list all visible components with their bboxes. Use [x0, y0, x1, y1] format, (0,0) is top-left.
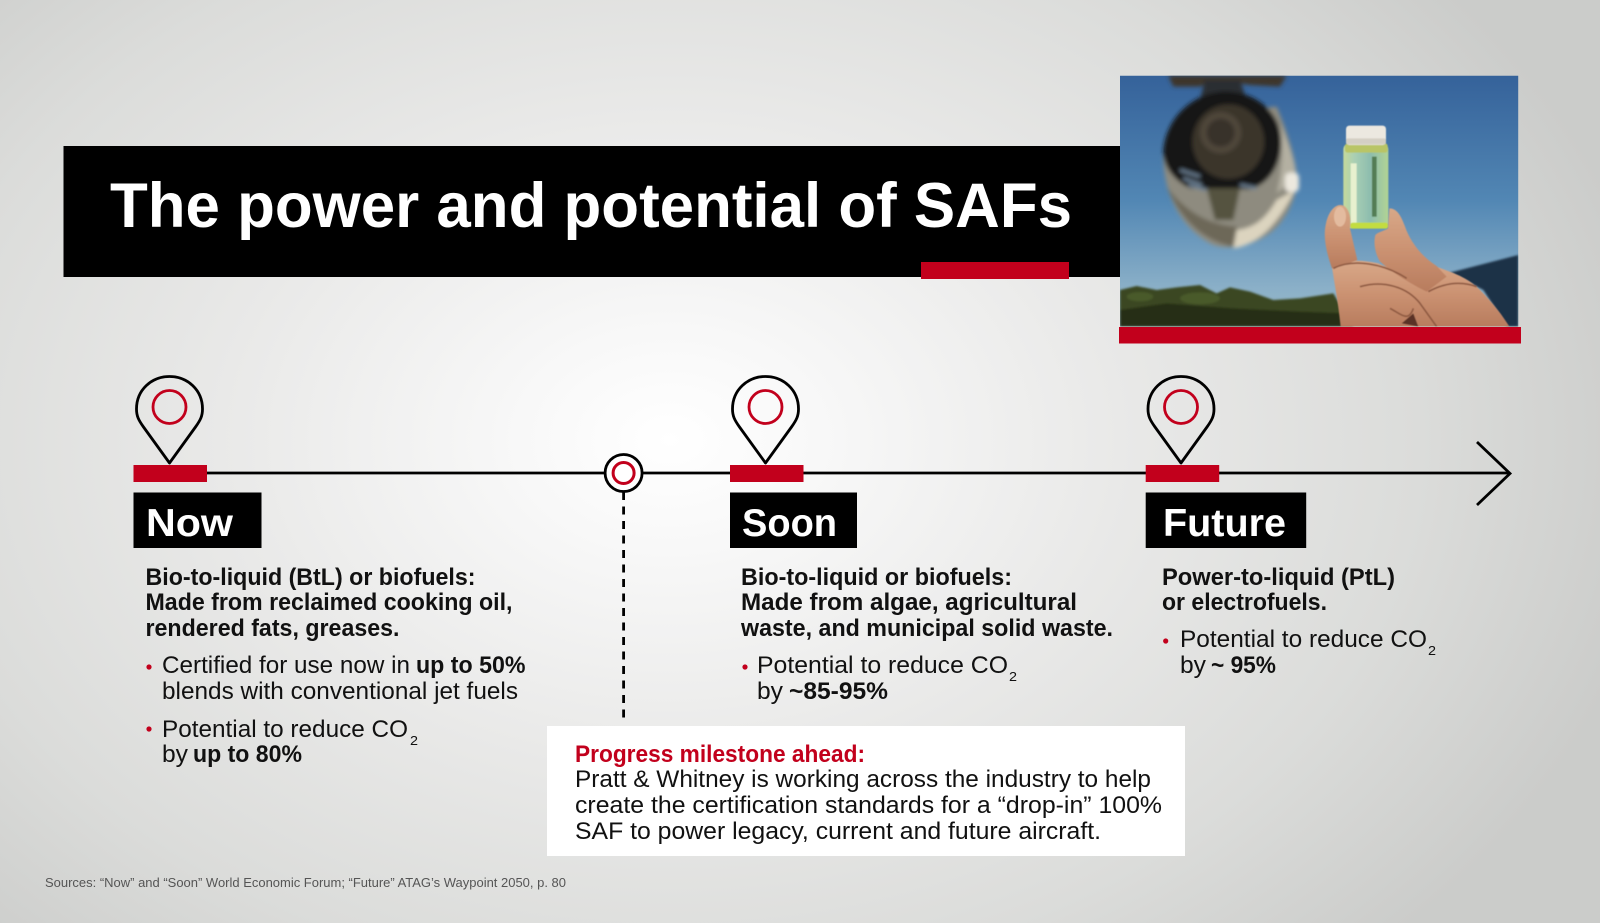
panel: soon — [730, 376, 1113, 705]
intro text — [146, 564, 512, 642]
bullet: certified: blends with conventional jet fuels — [162, 678, 518, 705]
bullet: certified — [146, 652, 526, 705]
arrow head — [1477, 442, 1510, 505]
intro text: or electrofuels. — [1162, 589, 1327, 616]
icon: location pin — [1148, 376, 1214, 463]
intro text: Made from reclaimed cooking oil, — [146, 589, 512, 616]
bullet: CO2 reduction: Potential to reduce CO — [162, 716, 408, 743]
vial — [1343, 126, 1388, 229]
bullet: CO2 reduction: 2 — [410, 733, 418, 748]
milestone marker — [605, 454, 642, 492]
icon: location pin — [732, 376, 798, 463]
intro text: Power-to-liquid (PtL) — [1162, 564, 1395, 591]
bullet: CO2 reduction — [742, 652, 1017, 705]
intro text: Bio-to-liquid (BtL) or biofuels: — [146, 564, 476, 591]
callout text: SAF to power legacy, current and future aircraft. — [575, 818, 1101, 845]
heading label: Future — [1163, 502, 1286, 545]
intro text — [1162, 564, 1395, 616]
heading label — [730, 492, 857, 548]
panel: now — [134, 376, 526, 768]
bullet: certified: Certified for use now in — [162, 652, 410, 679]
bullet: CO2 reduction — [146, 716, 418, 768]
heading label: Soon — [742, 502, 837, 545]
timeline marker — [730, 465, 804, 482]
heading label — [1146, 492, 1306, 548]
heading label — [134, 492, 262, 548]
hand — [1325, 205, 1509, 327]
title: The power and potential of SAFs — [110, 171, 1072, 241]
callout text: Pratt & Whitney is working across the industry to help — [575, 766, 1151, 793]
timeline — [207, 442, 1510, 724]
timeline axis — [207, 472, 1509, 474]
intro text — [740, 564, 1113, 642]
callout text: create the certification standards for a “drop-in” 100% — [575, 792, 1162, 819]
callout text — [575, 766, 1162, 845]
heading label: Now — [146, 502, 234, 545]
bullet: CO2 reduction: by — [757, 678, 784, 705]
bullet: CO2 reduction: Potential to reduce CO — [1180, 626, 1427, 653]
icon: location pin — [136, 376, 202, 463]
timeline marker — [134, 465, 207, 482]
bullet: CO2 reduction — [1163, 626, 1436, 679]
engine — [1163, 76, 1299, 248]
timeline marker — [1146, 465, 1219, 482]
bullet: CO2 reduction: ~ 95% — [1211, 652, 1276, 679]
sources footnote: Sources: “Now” and “Soon” World Economic Forum; “Future” ATAG’s Waypoint 2050, p. 80 — [45, 875, 566, 890]
title accent bar — [921, 262, 1069, 279]
intro text: Made from algae, agricultural — [741, 589, 1077, 616]
callout heading: Progress milestone ahead: — [575, 741, 865, 768]
bullet: CO2 reduction: Potential to reduce CO — [757, 652, 1008, 679]
intro text: waste, and municipal solid waste. — [740, 615, 1113, 642]
bullet: CO2 reduction: by — [162, 741, 189, 768]
photo: engine and SAF vial in hand — [1119, 76, 1521, 344]
panel: future — [1146, 376, 1436, 679]
bullet: CO2 reduction: 2 — [1428, 643, 1436, 658]
callout: progress milestone — [547, 726, 1185, 856]
dark structure — [1450, 255, 1518, 327]
dashed connector — [622, 492, 625, 724]
photo accent bar — [1119, 327, 1521, 344]
title banner — [64, 146, 1120, 279]
bullet: certified: up to 50% — [416, 652, 526, 679]
intro text: Bio-to-liquid or biofuels: — [741, 564, 1012, 591]
intro text: rendered fats, greases. — [146, 615, 400, 642]
bullet: CO2 reduction: by — [1180, 652, 1207, 679]
bullet: CO2 reduction: up to 80% — [193, 741, 302, 768]
bullet: CO2 reduction: ~85-95% — [789, 678, 888, 705]
tree line — [1120, 285, 1353, 327]
bullet: CO2 reduction: 2 — [1009, 669, 1017, 684]
